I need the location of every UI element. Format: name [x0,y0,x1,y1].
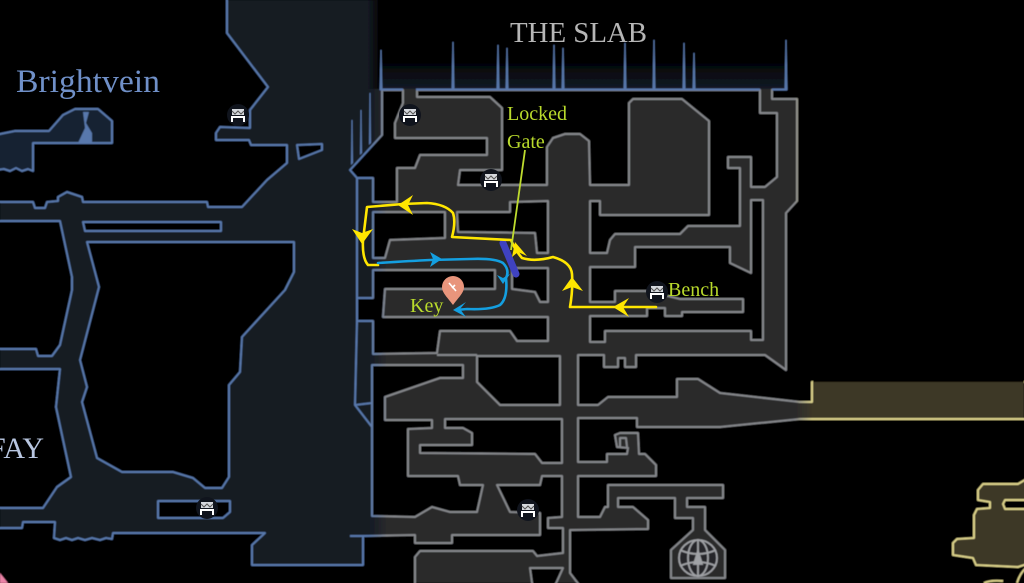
yellow band top edge [813,376,1024,385]
icon: bench top left [227,104,249,126]
label: locked gate: Locked [507,103,567,125]
heading: Brightvein: Brightvein [16,64,160,100]
icon: globe gate [679,540,717,576]
arrow: yellow left top [398,195,413,215]
interior walls [350,178,627,536]
icon: bench start [646,281,668,303]
arrow: yellow down [352,229,373,244]
yellow region lower right [953,477,1024,583]
arrow: yellow up-left at gate [512,242,527,257]
locked gate bar [503,243,516,274]
arrow: yellow up [562,277,583,291]
pointer line to gate [511,150,525,250]
blue chambers [0,0,563,583]
pink corner [0,573,8,583]
dark right background [570,0,1024,583]
icon: bench lower left [196,497,218,519]
blue route with arrows [378,252,510,317]
right dark tint [912,421,1024,583]
icon: bench upper [399,104,421,126]
label: key: Key [410,295,443,317]
grey chambers [350,90,777,583]
Brightvein island [0,109,112,171]
black area above the slab [368,0,1024,89]
yellow route with arrows [352,195,656,317]
blue strip with vertical spikes under The Slab [351,40,788,165]
label: bench: Bench [668,279,719,301]
icon: bench lower middle [517,499,539,521]
label: locked gate: Gate [507,131,545,153]
label: locked gate [507,103,567,153]
heading: The Slab: THE SLAB [510,17,647,49]
arrow: blue right [430,252,442,267]
icon: key marker [442,276,464,305]
icon: bench middle [480,169,502,191]
arrow: blue left [453,302,466,317]
arrow: yellow left [613,298,629,317]
arrow: blue down [497,274,510,284]
